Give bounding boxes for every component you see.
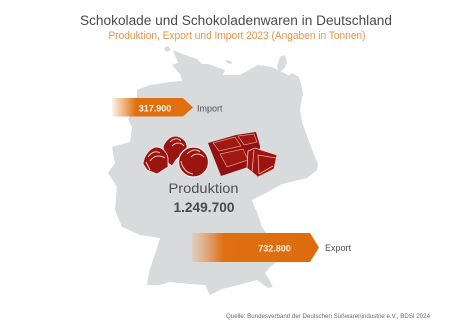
arrow: export: 732.800 xyxy=(258,244,291,254)
arrow: import xyxy=(112,98,193,116)
map: Fehmarn island xyxy=(226,60,232,64)
map: Usedom coast xyxy=(289,73,299,80)
value: production: 1.249.700 xyxy=(174,200,234,215)
chocolate piece xyxy=(247,148,277,177)
praline left xyxy=(143,147,168,174)
arrow: import: 317.900 xyxy=(139,104,171,114)
label: production: Produktion xyxy=(168,180,238,196)
praline front xyxy=(178,147,208,177)
bar segments xyxy=(213,134,257,167)
label: import: Import xyxy=(197,104,223,114)
map: Rügen island xyxy=(277,55,287,72)
icon: pralines xyxy=(143,136,208,177)
praline back xyxy=(163,136,187,166)
map: small island xyxy=(164,46,171,52)
title: Schokolade und Schokoladenwaren in Deutschland xyxy=(80,13,392,29)
arrow: export xyxy=(192,233,319,262)
subtitle: Produktion, Export und Import 2023 (Angaben in Tonnen) xyxy=(108,30,366,42)
source: Quelle: Bundesverband der Deutschen Süßwarenindustrie e.V., BDSI 2024 xyxy=(226,313,430,320)
label: export: Export xyxy=(325,243,352,253)
map of Germany xyxy=(108,46,318,295)
icon: chocolate bar xyxy=(208,132,277,178)
